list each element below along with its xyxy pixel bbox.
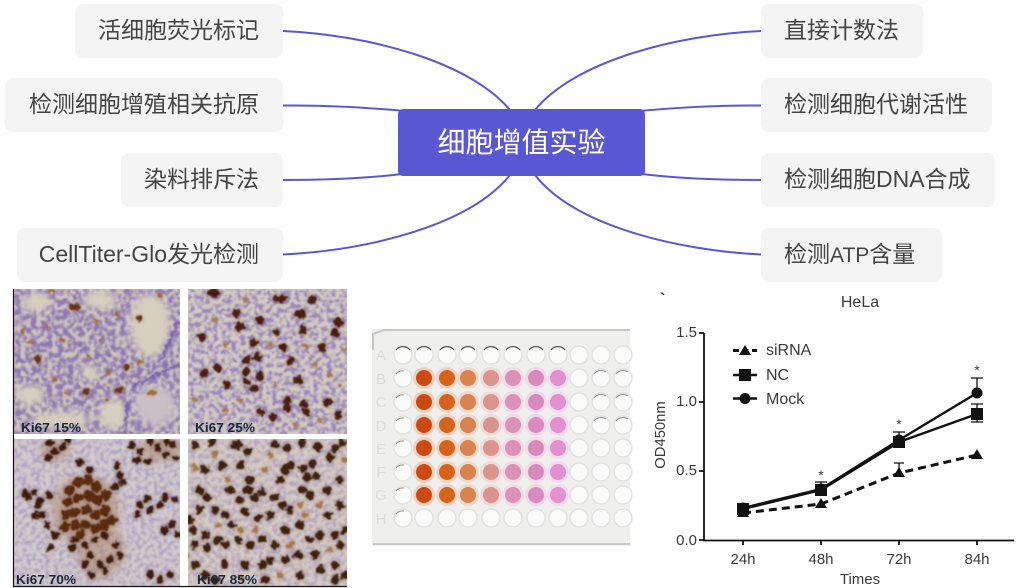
right node: 检测细胞DNA合成: 检测细胞DNA合成	[784, 166, 971, 192]
left node: 染料排斥法: 染料排斥法	[144, 166, 259, 192]
y axis title: OD450nm	[653, 401, 669, 469]
left node: 染料排斥法	[121, 153, 283, 207]
central title	[398, 109, 645, 176]
left node: 活细胞荧光标记	[75, 4, 283, 58]
central title: 细胞增值实验	[437, 127, 606, 158]
row letters: B	[376, 371, 386, 388]
right node: 检测ATP含量: 检测ATP含量	[784, 241, 915, 267]
left node: CellTiter-Glo发光检测	[17, 228, 283, 282]
label: Ki67 70%: Ki67 70%	[16, 573, 76, 587]
x tick labels: 48h	[808, 551, 834, 568]
right node: 直接计数法: 直接计数法	[784, 17, 899, 43]
y tick labels: 0.0	[676, 532, 697, 549]
x tick labels: 72h	[886, 551, 912, 568]
micrograph: Ki67 70%	[14, 438, 184, 587]
row letters: E	[376, 441, 386, 458]
series: NC	[737, 404, 983, 515]
x tick labels	[730, 551, 990, 568]
row letters: D	[376, 418, 387, 435]
significance asterisks	[818, 362, 980, 483]
empty wells	[394, 346, 632, 527]
line chart: HeLa OD450nm: `	[660, 291, 665, 308]
micrograph: Ki67 25%	[188, 289, 347, 435]
row letters	[375, 347, 387, 528]
label: Ki67 15%: Ki67 15%	[21, 421, 81, 435]
right node: 检测细胞DNA合成	[761, 153, 995, 207]
filled wells: colour gradient from orange to pink	[414, 368, 568, 504]
label: Ki67 25%: Ki67 25%	[195, 421, 255, 435]
legend: siRNA	[766, 342, 812, 359]
row letters: F	[376, 464, 386, 481]
y tick labels: 1.0	[676, 393, 697, 410]
row letters: C	[376, 394, 387, 411]
x tick labels: 84h	[964, 551, 990, 568]
micrograph: Ki67 15%	[14, 289, 180, 435]
left node: 检测细胞增殖相关抗原	[5, 78, 283, 132]
right node: 检测细胞代谢活性	[761, 78, 992, 132]
x axis title: Times	[840, 571, 880, 588]
legend	[733, 342, 812, 408]
connector lines	[283, 30, 761, 256]
Ki67 staining micrographs	[12, 289, 347, 588]
row letters: H	[376, 511, 386, 528]
x tick labels: 24h	[730, 551, 756, 568]
significance asterisks: *	[896, 416, 902, 432]
row letters: G	[375, 487, 387, 504]
y tick labels: 1.5	[676, 324, 697, 341]
right node: 直接计数法	[761, 4, 923, 58]
left node: CellTiter-Glo发光检测: CellTiter-Glo发光检测	[39, 241, 259, 267]
significance asterisks: *	[974, 362, 980, 378]
axes	[699, 333, 1014, 545]
chart title: HeLa	[841, 294, 879, 311]
left node: 活细胞荧光标记: 活细胞荧光标记	[98, 17, 259, 43]
right node: 检测ATP含量	[761, 228, 942, 282]
series: Mock	[738, 378, 983, 514]
right node: 检测细胞代谢活性: 检测细胞代谢活性	[784, 91, 968, 117]
micrograph: Ki67 85%	[185, 439, 347, 587]
left node: 检测细胞增殖相关抗原: 检测细胞增殖相关抗原	[29, 91, 259, 117]
y tick labels: 0.5	[676, 462, 697, 479]
legend: Mock	[766, 391, 805, 408]
label: Ki67 85%: Ki67 85%	[197, 573, 257, 587]
series: siRNA	[737, 449, 983, 517]
legend: NC	[766, 367, 789, 384]
y tick labels	[676, 324, 697, 549]
significance asterisks: *	[818, 467, 824, 483]
row letters: A	[376, 347, 386, 364]
